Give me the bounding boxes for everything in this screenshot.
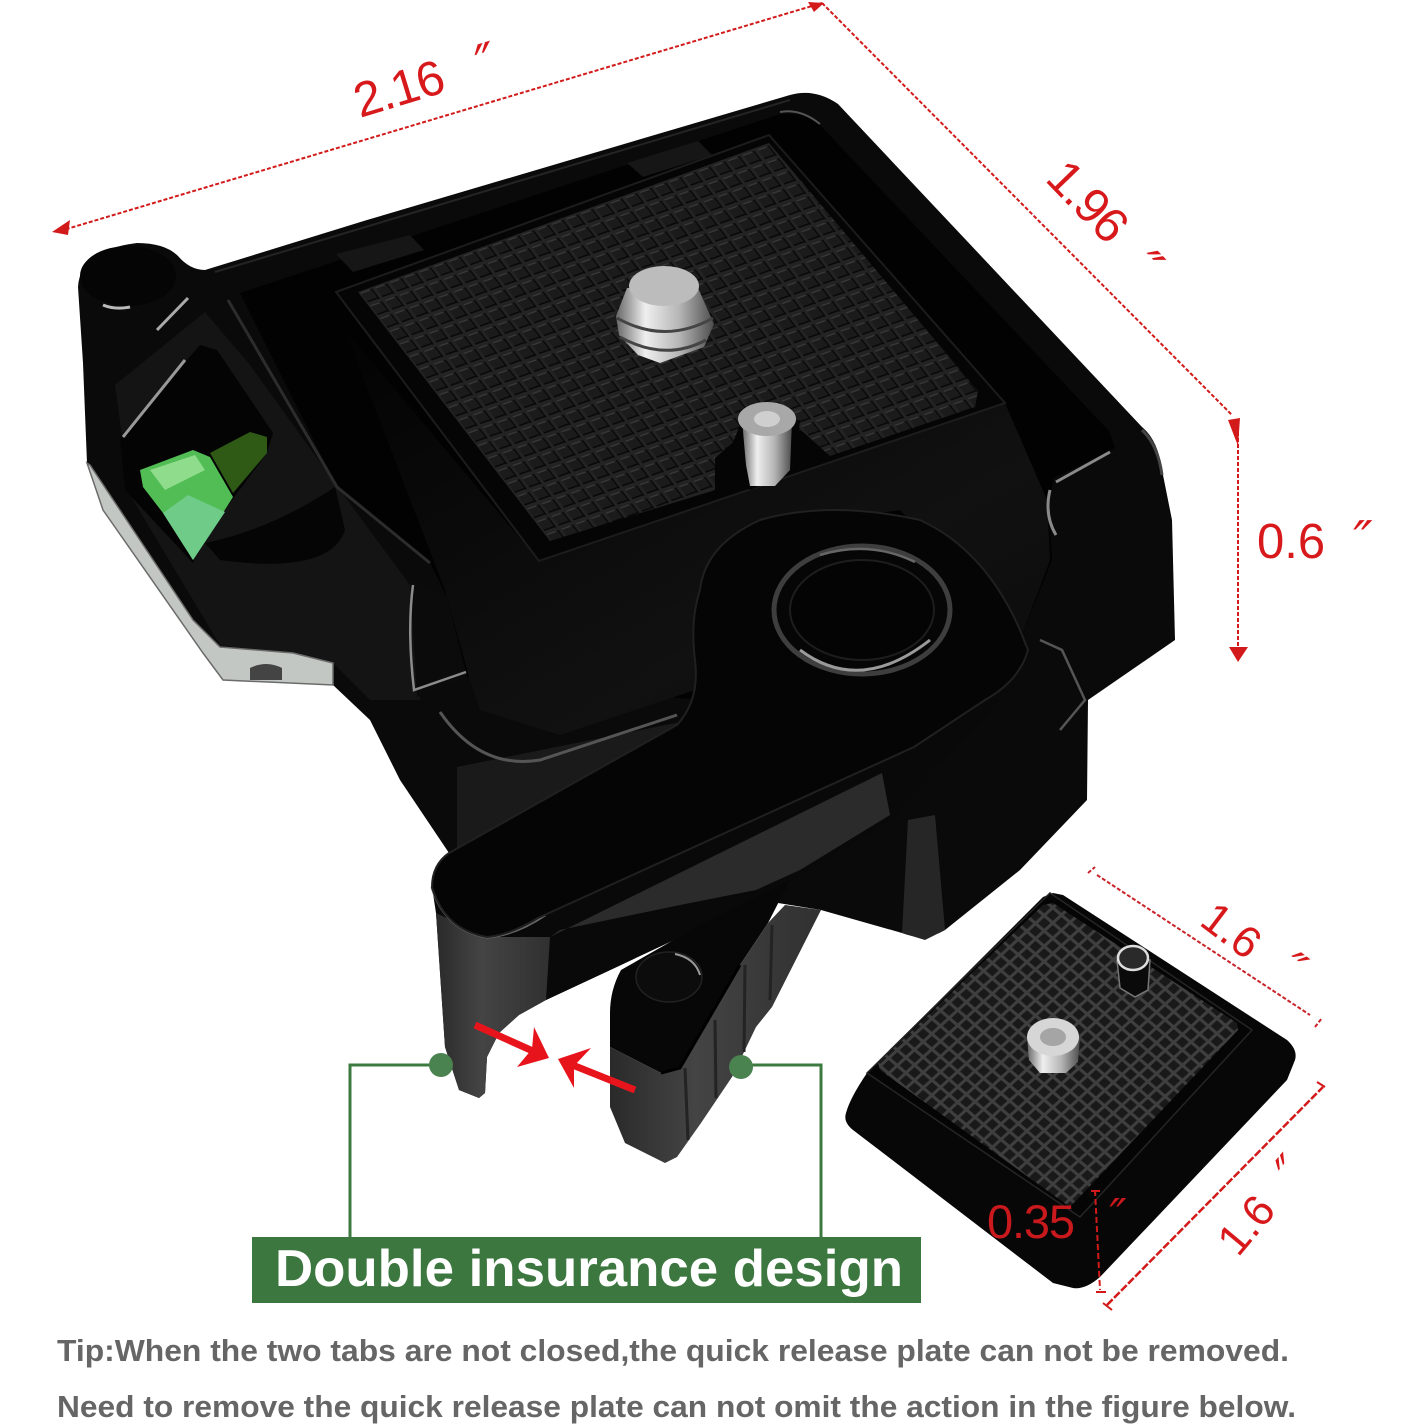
spare quick release plate <box>845 893 1296 1288</box>
dimension: 0.6 height: 0.6 <box>1257 515 1325 569</box>
green bracket connector <box>350 1053 821 1238</box>
tip text <box>57 1333 1296 1424</box>
quick release plate, top <box>336 135 1005 561</box>
front vial <box>140 450 233 560</box>
dimension: 2.16 width <box>52 2 824 235</box>
lower band highlight <box>457 720 690 848</box>
dimension: 0.6 height <box>1228 418 1373 662</box>
clamp main body <box>78 93 1175 1000</box>
body left face around level <box>115 312 420 700</box>
right block strip <box>902 815 945 940</box>
pivot ring <box>774 546 950 674</box>
dimension: 1.96 depth: 1.96 <box>1036 150 1139 254</box>
dimension: plate 0.35 height: 0.35 <box>987 1195 1075 1248</box>
dimension: plate 0.35 height <box>987 1189 1127 1292</box>
tab slots on frame <box>336 141 712 272</box>
tip text: Tip:When the two tabs are not closed,the quick release plate can not be removed. <box>57 1333 1289 1368</box>
level vial housing <box>80 246 345 685</box>
dimension: plate 1.6 depth: ″ <box>1265 1145 1319 1195</box>
dimension: plate 1.6 depth <box>1103 1082 1325 1310</box>
locking pin <box>722 420 800 490</box>
knob <box>80 246 176 306</box>
spare screw <box>1027 1037 1080 1073</box>
dimension: 1.96 depth: ″ <box>1117 240 1174 296</box>
right clamp tab <box>610 880 821 1163</box>
dimension: plate 1.6 width: 1.6 <box>1192 893 1270 969</box>
rear vial <box>210 432 267 493</box>
screw <box>616 288 714 363</box>
glass base <box>87 463 333 685</box>
dimension: plate 1.6 width: ″ <box>1268 942 1316 997</box>
tip text: Need to remove the quick release plate can not omit the action in the figure below. <box>57 1389 1296 1424</box>
banner: double insurance design: Double insurance design <box>275 1240 903 1298</box>
lever underside and left tab <box>432 697 1000 1098</box>
recess <box>240 114 1115 700</box>
dimension: plate 0.35 height: ″ <box>1109 1189 1127 1243</box>
tab button <box>636 952 702 1002</box>
dimension: plate 1.6 width <box>1088 867 1322 1027</box>
dimension: 1.96 depth <box>822 3 1232 415</box>
side rib <box>410 580 467 697</box>
spare pin <box>1117 960 1150 997</box>
dimension: 0.6 height: ″ <box>1353 511 1373 571</box>
red arrows: tabs closing <box>475 1025 635 1090</box>
dimension: 2.16 width: ″ <box>469 32 506 95</box>
lever with round pivot <box>432 510 1028 1098</box>
rim highlights <box>1142 430 1162 475</box>
dimension: plate 1.6 depth: 1.6 <box>1208 1186 1285 1264</box>
window <box>120 345 273 563</box>
lever top <box>432 510 1028 937</box>
inner front wall <box>345 330 1050 735</box>
dimension: 2.16 width: 2.16 <box>347 50 451 129</box>
